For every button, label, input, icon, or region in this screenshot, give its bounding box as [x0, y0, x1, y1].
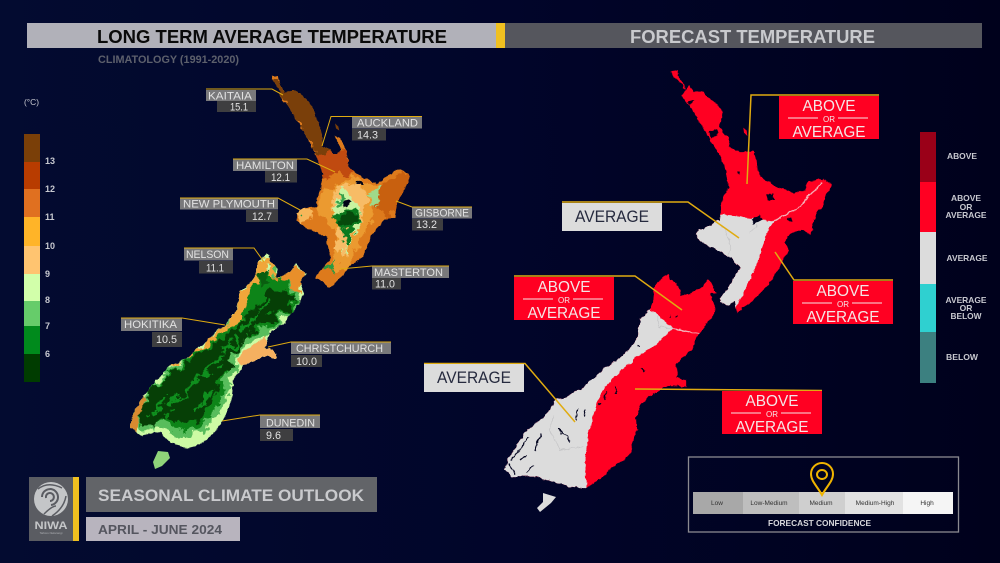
- label: Dunedin: DUNEDIN: [266, 418, 315, 430]
- callout: northern South Island above or average: AVERAGE: [528, 305, 600, 322]
- temperature legend: 8: [45, 295, 50, 305]
- label: Hokitika: 10.5: [156, 334, 177, 346]
- temperature legend: 9: [45, 269, 50, 279]
- callout: eastern North Island above or average: OR: [837, 300, 849, 309]
- label: Hamilton: 12.1: [271, 172, 290, 184]
- label: Dunedin: [222, 415, 320, 442]
- label: Kaitaia: KAITAIA: [208, 90, 253, 102]
- label: Nelson: 11.1: [206, 262, 224, 274]
- map: forecast North Island: [667, 67, 837, 317]
- forecast legend: AVERAGE: [946, 295, 987, 305]
- label: Masterton: MASTERTON: [374, 267, 443, 279]
- forecast confidence panel: Medium: [809, 500, 833, 507]
- label: Nelson: [184, 248, 264, 274]
- forecast confidence panel: [688, 457, 958, 532]
- label: Gisborne: 13.2: [416, 219, 437, 231]
- Stewart Island forecast: [537, 493, 556, 512]
- label: Dunedin: 9.6: [266, 430, 281, 442]
- label: Hamilton: [233, 159, 335, 184]
- callout: eastern North Island above or average: AVERAGE: [806, 309, 880, 326]
- label: New Plymouth: [180, 198, 300, 223]
- temperature legend: 13: [45, 156, 55, 166]
- title: seasonal climate outlook: SEASONAL CLIMATE OUTLOOK: [98, 486, 365, 505]
- label: New Plymouth: 12.7: [252, 211, 272, 223]
- callout: eastern South Island above or average: [635, 389, 822, 436]
- right header bar: FORECAST TEMPERATURE: [630, 26, 875, 47]
- forecast legend: BELOW: [950, 311, 982, 321]
- temperature legend: 11: [45, 212, 55, 222]
- callout: South Island average: AVERAGE: [437, 369, 511, 387]
- callout: eastern North Island above or average: [775, 252, 893, 326]
- callout: North Island average: [562, 202, 739, 238]
- forecast legend: BELOW: [946, 352, 979, 362]
- forecast legend: AVERAGE: [946, 210, 987, 220]
- forecast confidence panel: Low: [711, 500, 723, 507]
- label: Kaitaia: [206, 89, 283, 114]
- map: long term average North Island: [272, 76, 410, 288]
- left header bar: [27, 23, 496, 48]
- logo panel: NIWA: NIWA: [34, 520, 68, 532]
- forecast confidence panel: Medium-High: [856, 500, 895, 507]
- callout: eastern South Island above or average: AVERAGE: [736, 419, 808, 436]
- callout: eastern North Island above or average: ABOVE: [816, 283, 870, 300]
- label: Christchurch: CHRISTCHURCH: [296, 343, 383, 355]
- callout: northern South Island above or average: OR: [558, 296, 570, 305]
- label: Gisborne: [396, 201, 472, 231]
- date range: APRIL - JUNE 2024: [98, 522, 223, 537]
- right header bar: [505, 23, 982, 48]
- map: forecast South Island: [504, 274, 716, 488]
- forecast confidence panel: FORECAST CONFIDENCE: [768, 518, 871, 528]
- temperature legend: 12: [45, 184, 55, 194]
- label: Gisborne: GISBORNE: [415, 208, 469, 220]
- label: Kaitaia: 15.1: [230, 102, 248, 114]
- callout: North Island above or average: ABOVE: [802, 98, 856, 115]
- label: Hokitika: HOKITIKA: [124, 319, 178, 331]
- callout: North Island above or average: [747, 95, 879, 184]
- label: Auckland: AUCKLAND: [357, 118, 418, 130]
- logo panel: NIWA: Taihoro Nukurangi: [40, 531, 63, 535]
- map: long term average South Island: [130, 254, 306, 449]
- label: Hamilton: HAMILTON: [236, 160, 294, 172]
- temperature legend: (°C): [24, 97, 39, 107]
- icon: location pin: [811, 463, 833, 495]
- label: Hokitika: [121, 318, 225, 347]
- callout: northern South Island above or average: ABOVE: [538, 279, 590, 296]
- temperature legend: 10: [45, 241, 55, 251]
- forecast legend: OR: [960, 303, 972, 313]
- callout: South Island average: [424, 364, 575, 422]
- callout: eastern South Island above or average: ABOVE: [746, 393, 798, 410]
- forecast legend: [920, 132, 988, 383]
- forecast confidence panel: Low-Medium: [750, 500, 788, 507]
- label: Christchurch: 10.0: [296, 356, 317, 368]
- forecast confidence panel: High: [920, 500, 934, 507]
- temperature legend: [24, 97, 55, 382]
- callout: North Island average: AVERAGE: [575, 208, 649, 226]
- label: Masterton: 11.0: [375, 279, 395, 291]
- left header bar: LONG TERM AVERAGE TEMPERATURE: [97, 26, 447, 47]
- forecast legend: OR: [960, 202, 972, 212]
- title: seasonal climate outlook: [86, 477, 377, 512]
- forecast legend: ABOVE: [951, 193, 981, 203]
- label: Auckland: [322, 116, 422, 146]
- callout: North Island above or average: AVERAGE: [792, 124, 866, 141]
- label: New Plymouth: NEW PLYMOUTH: [183, 199, 275, 211]
- subtitle: CLIMATOLOGY (1991-2020): [98, 54, 239, 66]
- Stewart Island climatology: [153, 451, 170, 469]
- temperature legend: 7: [45, 321, 50, 331]
- label: Nelson: NELSON: [186, 249, 229, 261]
- logo panel: NIWA: [29, 477, 79, 541]
- forecast legend: AVERAGE: [946, 253, 988, 263]
- forecast legend: ABOVE: [947, 151, 977, 161]
- label: Christchurch: [268, 342, 391, 368]
- header accent: [496, 23, 505, 48]
- callout: northern South Island above or average: [514, 276, 682, 322]
- date range: [86, 517, 240, 541]
- callout: eastern South Island above or average: OR: [766, 410, 778, 419]
- callout: North Island above or average: OR: [823, 115, 835, 124]
- label: Masterton: [340, 266, 449, 291]
- label: Auckland: 14.3: [357, 130, 378, 142]
- temperature legend: 6: [45, 349, 50, 359]
